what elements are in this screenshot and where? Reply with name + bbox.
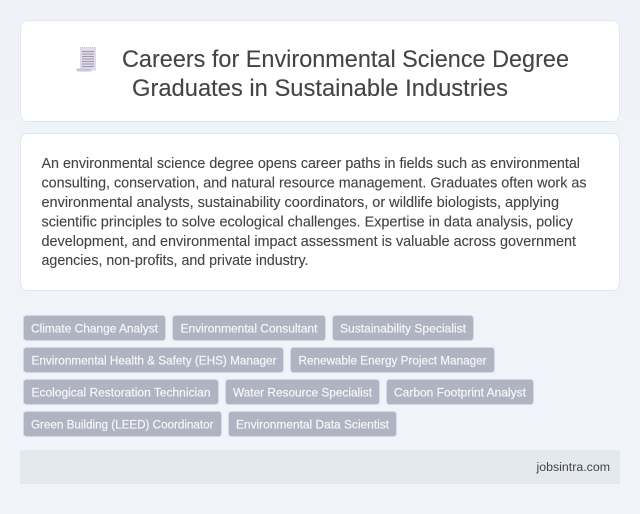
text block: description paragraph: agencies, non-profits, and private industry. bbox=[42, 253, 308, 269]
title bbox=[122, 46, 569, 102]
text block: description paragraph: environmental analysts, sustainability coordinators, or wildlife biologists, applying bbox=[42, 195, 559, 211]
tag: Green Building (LEED) Coordinator bbox=[24, 412, 222, 436]
tag: Water Resource Specialist: Water Resource Specialist bbox=[233, 386, 373, 400]
tag: Carbon Footprint Analyst bbox=[386, 380, 534, 404]
icon: document scroll bbox=[76, 48, 96, 72]
tag: Renewable Energy Project Manager bbox=[290, 348, 494, 372]
tag: Ecological Restoration Technician bbox=[24, 380, 218, 404]
tag: Climate Change Analyst: Climate Change Analyst bbox=[31, 322, 159, 336]
tag: Environmental Data Scientist bbox=[228, 412, 396, 436]
text block: description paragraph: development, and environmental impact assessment is valuable across government bbox=[42, 234, 576, 250]
tag: Water Resource Specialist bbox=[226, 380, 380, 404]
tag: EHS Manager: Environmental Health & Safety (EHS) Manager bbox=[32, 354, 276, 368]
tag: Renewable Energy Project Manager: Renewable Energy Project Manager bbox=[298, 354, 486, 368]
footer bar bbox=[20, 450, 620, 484]
text block: description paragraph: scientific principles to solve ecological challenges. Expertise in data analysis, policy bbox=[42, 214, 574, 230]
tag: Carbon Footprint Analyst: Carbon Footprint Analyst bbox=[394, 386, 527, 400]
tag: Environmental Consultant: Environmental Consultant bbox=[180, 322, 318, 336]
title: Graduates in Sustainable Industries bbox=[132, 75, 508, 102]
title: Careers for Environmental Science Degree bbox=[122, 46, 569, 73]
text block: description paragraph: consulting, conservation, and natural resource management. Graduates often work as bbox=[42, 176, 586, 192]
panel: career tags bbox=[24, 316, 534, 436]
panel: title header bbox=[20, 20, 620, 122]
tag: Green Building (LEED) Coordinator: Green Building (LEED) Coordinator bbox=[31, 418, 214, 432]
tag: EHS Manager bbox=[24, 348, 284, 372]
tag: Ecological Restoration Technician: Ecological Restoration Technician bbox=[32, 386, 211, 400]
tag: Climate Change Analyst bbox=[24, 316, 166, 340]
tag: Environmental Data Scientist: Environmental Data Scientist bbox=[236, 418, 390, 432]
tag: Sustainability Specialist bbox=[332, 316, 474, 340]
text block: description paragraph: An environmental science degree opens career paths in fields such as environmental bbox=[42, 156, 580, 172]
tag: Environmental Consultant bbox=[172, 316, 326, 340]
footer source text: jobsintra.com bbox=[535, 460, 610, 474]
text block: description paragraph bbox=[42, 156, 586, 269]
tag: Sustainability Specialist: Sustainability Specialist bbox=[340, 322, 467, 336]
panel: description bbox=[20, 134, 620, 290]
